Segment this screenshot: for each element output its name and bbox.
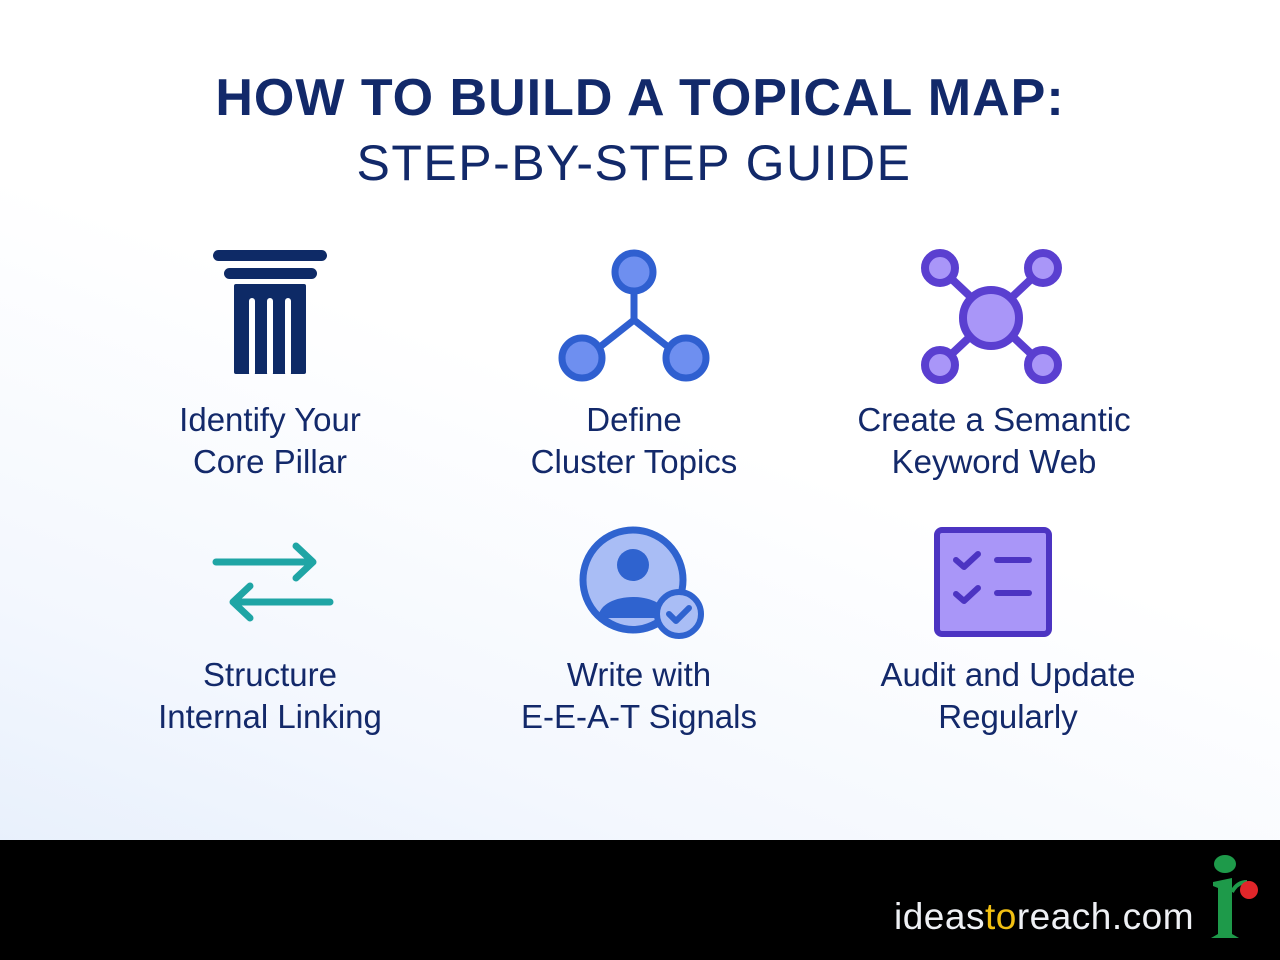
logo — [1211, 855, 1258, 938]
icon: semantic web — [925, 253, 1058, 380]
icon: arrows — [216, 546, 330, 618]
label: step 4: Structure — [203, 656, 337, 693]
footer: website: ideastoreach.com — [894, 896, 1194, 937]
label: step 3 — [857, 401, 1131, 480]
label: step 4: Internal Linking — [158, 698, 382, 735]
label: step 1: Identify Your — [179, 401, 361, 438]
label: step 4 — [158, 656, 382, 735]
icon: pillar — [213, 250, 327, 376]
footer — [0, 840, 1280, 960]
label: step 2 — [531, 401, 737, 480]
label: step 1: Core Pillar — [193, 443, 347, 480]
label: step 5: E-E-A-T Signals — [521, 698, 757, 735]
label: step 5 — [521, 656, 757, 735]
label: step 6: Regularly — [938, 698, 1078, 735]
label: step 5: Write with — [567, 656, 711, 693]
icon: checklist — [937, 530, 1049, 634]
subtitle: STEP-BY-STEP GUIDE — [357, 135, 911, 191]
icon: cluster — [562, 253, 706, 378]
label: step 3: Keyword Web — [892, 443, 1096, 480]
title: HOW TO BUILD A TOPICAL MAP: — [215, 69, 1065, 127]
label: step 1 — [179, 401, 361, 480]
icon: person with badge — [583, 530, 701, 636]
label: step 6 — [880, 656, 1136, 735]
label: step 2: Define — [586, 401, 682, 438]
label: step 6: Audit and Update — [880, 656, 1136, 693]
label: step 3: Create a Semantic — [857, 401, 1131, 438]
label: step 2: Cluster Topics — [531, 443, 737, 480]
